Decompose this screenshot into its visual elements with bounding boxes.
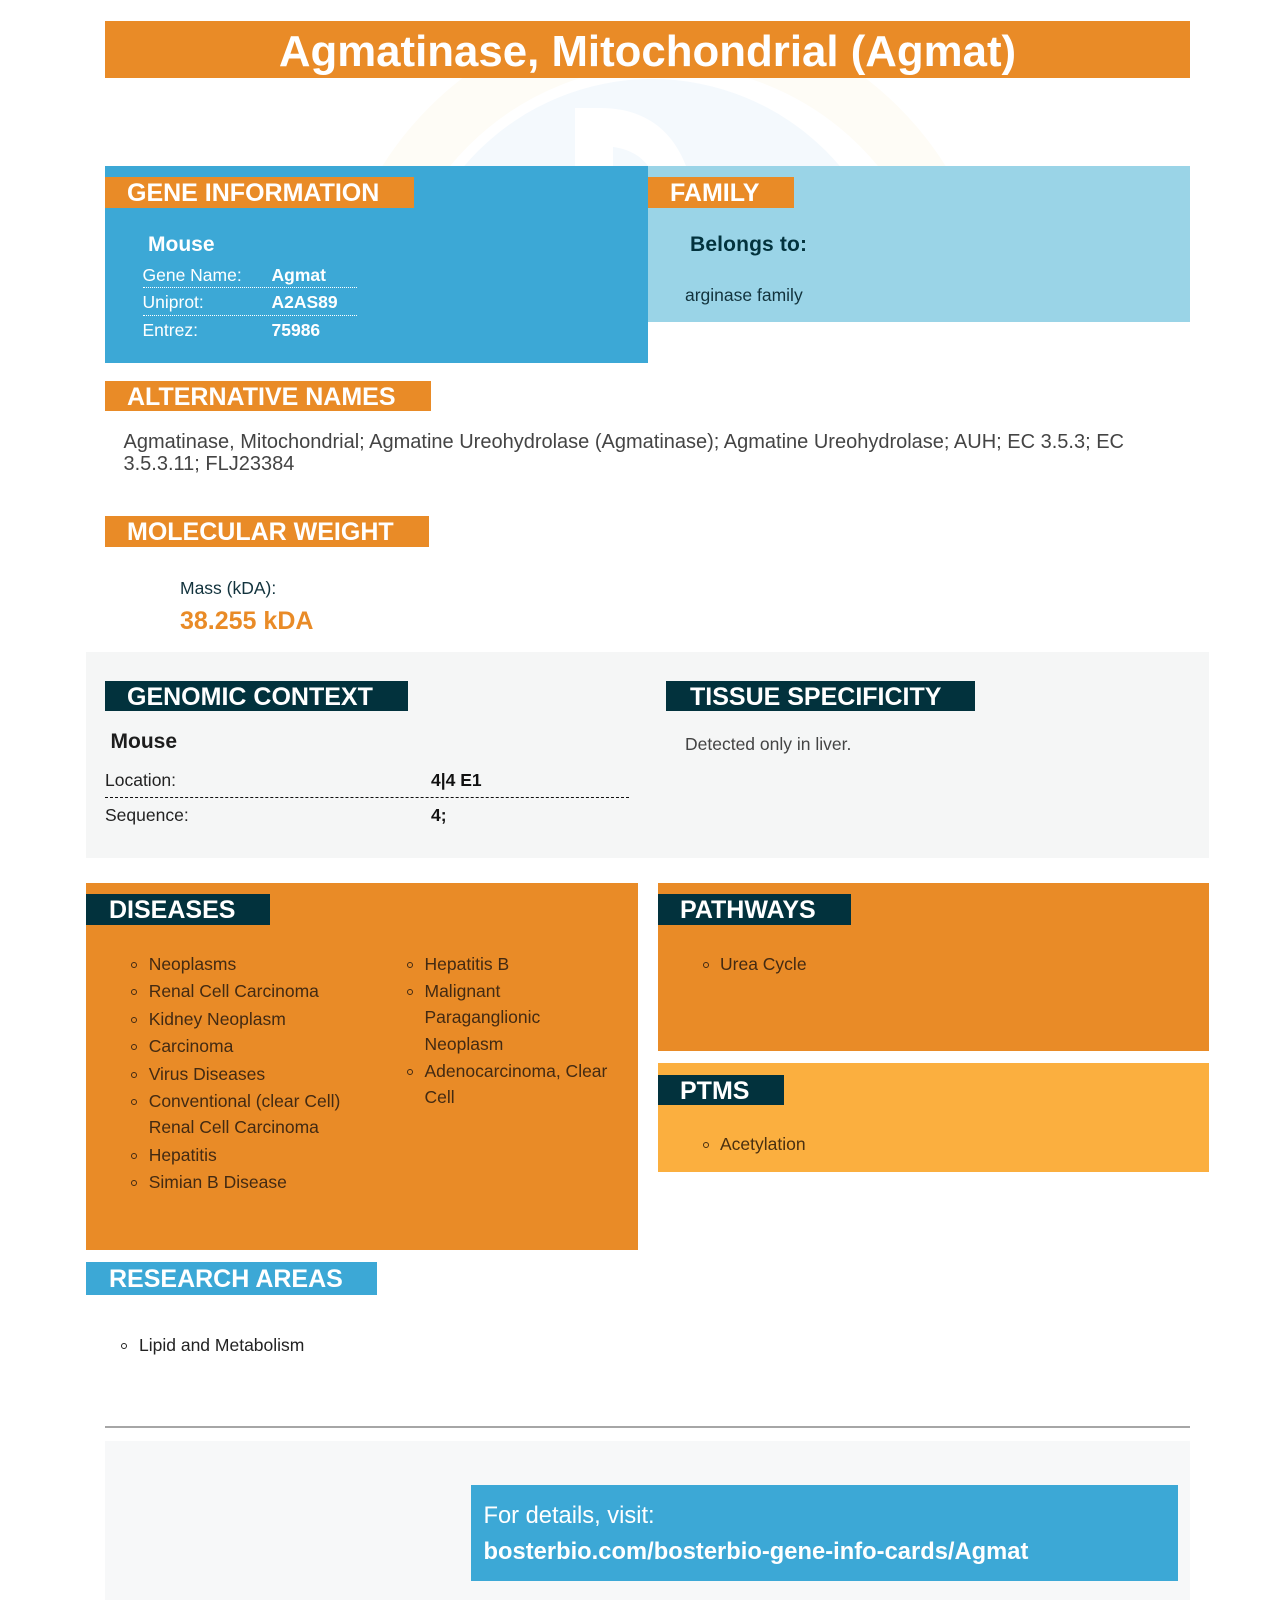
ptms list item: Acetylation xyxy=(720,1134,806,1154)
item: Paraganglionic xyxy=(424,1007,540,1027)
heading: diseases: DISEASES xyxy=(109,896,235,924)
alternative names text xyxy=(124,431,1124,475)
details url: bosterbio.com/bosterbio-gene-info-cards/Agmat xyxy=(484,1539,1028,1565)
heading: diseases xyxy=(86,894,270,925)
heading: alternative names: ALTERNATIVE NAMES xyxy=(127,383,396,411)
item: Neoplasms xyxy=(149,954,236,974)
title: Agmatinase, Mitochondrial (Agmat) xyxy=(279,27,1016,76)
item: Simian B Disease xyxy=(149,1172,287,1192)
entrez row xyxy=(142,320,320,340)
panel: pathways xyxy=(658,883,1209,1051)
panel: family xyxy=(648,166,1190,322)
panel: ptms xyxy=(658,1063,1209,1172)
heading: tissue specificity: TISSUE SPECIFICITY xyxy=(690,683,941,711)
gene name row: Gene Name: xyxy=(142,265,242,285)
divider rule xyxy=(105,1426,1190,1428)
heading: ptms xyxy=(658,1075,784,1105)
item: Virus Diseases xyxy=(149,1064,265,1084)
location row xyxy=(105,765,629,798)
location row: 4|4 E1 xyxy=(431,770,482,790)
item: Adenocarcinoma, Clear xyxy=(424,1061,607,1081)
family value: arginase family xyxy=(685,285,803,305)
item: Neoplasm xyxy=(424,1034,503,1054)
species: mouse: Mouse xyxy=(110,730,177,753)
item: Hepatitis xyxy=(149,1145,217,1165)
heading: molecular weight: MOLECULAR WEIGHT xyxy=(127,518,394,546)
mass value: 38.255 kDA xyxy=(180,607,313,635)
research areas list item: Lipid and Metabolism xyxy=(139,1335,304,1355)
call to action xyxy=(471,1485,1178,1581)
background watermark logo xyxy=(383,78,945,166)
heading: research areas: RESEARCH AREAS xyxy=(109,1265,343,1293)
panel: genomic context and tissue specificity xyxy=(86,652,1209,858)
disease list column 1 xyxy=(131,954,340,1192)
heading: family: FAMILY xyxy=(670,179,759,207)
item: Renal Cell Carcinoma xyxy=(149,981,319,1001)
sequence row: 4; xyxy=(431,805,447,825)
entrez row: 75986 xyxy=(272,320,320,340)
item xyxy=(407,1061,608,1107)
species: mouse: Mouse xyxy=(148,233,215,256)
sequence row xyxy=(105,805,447,825)
item xyxy=(131,1091,340,1137)
heading: ptms: PTMS xyxy=(680,1077,749,1105)
belongs to label: Belongs to: xyxy=(690,233,807,256)
location row: Location: xyxy=(105,770,176,790)
uniprot row xyxy=(142,288,357,316)
gene name row: Agmat xyxy=(272,265,326,285)
mass label: Mass (kDA): xyxy=(180,578,276,598)
heading: pathways xyxy=(658,894,851,925)
title xyxy=(105,21,1190,78)
panel: footer xyxy=(105,1441,1190,1600)
disease list column 2 xyxy=(407,954,608,1107)
alternative names text: Agmatinase, Mitochondrial; Agmatine Ureohydrolase (Agmatinase); Agmatine Ureohydrolase; AUH; EC 3.5.3; EC xyxy=(124,431,1124,453)
entrez row: Entrez: xyxy=(142,320,198,340)
uniprot row: A2AS89 xyxy=(272,292,338,312)
item: Carcinoma xyxy=(149,1036,233,1056)
heading: gene information: GENE INFORMATION xyxy=(127,179,379,207)
heading: genomic context: GENOMIC CONTEXT xyxy=(127,683,373,711)
alternative names text: 3.5.3.11; FLJ23384 xyxy=(124,453,294,475)
heading: family xyxy=(648,177,794,208)
gene name row xyxy=(142,260,357,288)
item xyxy=(407,981,540,1054)
heading: research areas xyxy=(86,1262,377,1295)
item: Conventional (clear Cell) xyxy=(149,1091,340,1111)
heading: pathways: PATHWAYS xyxy=(680,896,816,924)
item: Renal Cell Carcinoma xyxy=(149,1117,319,1137)
item: Hepatitis B xyxy=(424,954,509,974)
sequence row: Sequence: xyxy=(105,805,189,825)
item: Cell xyxy=(424,1087,455,1107)
panel: gene information xyxy=(105,166,648,363)
tissue specificity text: Detected only in liver. xyxy=(685,734,851,754)
panel: diseases xyxy=(86,883,638,1250)
details label: For details, visit: xyxy=(484,1503,655,1529)
item: Kidney Neoplasm xyxy=(149,1009,286,1029)
item: Malignant xyxy=(424,981,500,1001)
pathways list item: Urea Cycle xyxy=(720,954,807,974)
uniprot row: Uniprot: xyxy=(142,292,204,312)
